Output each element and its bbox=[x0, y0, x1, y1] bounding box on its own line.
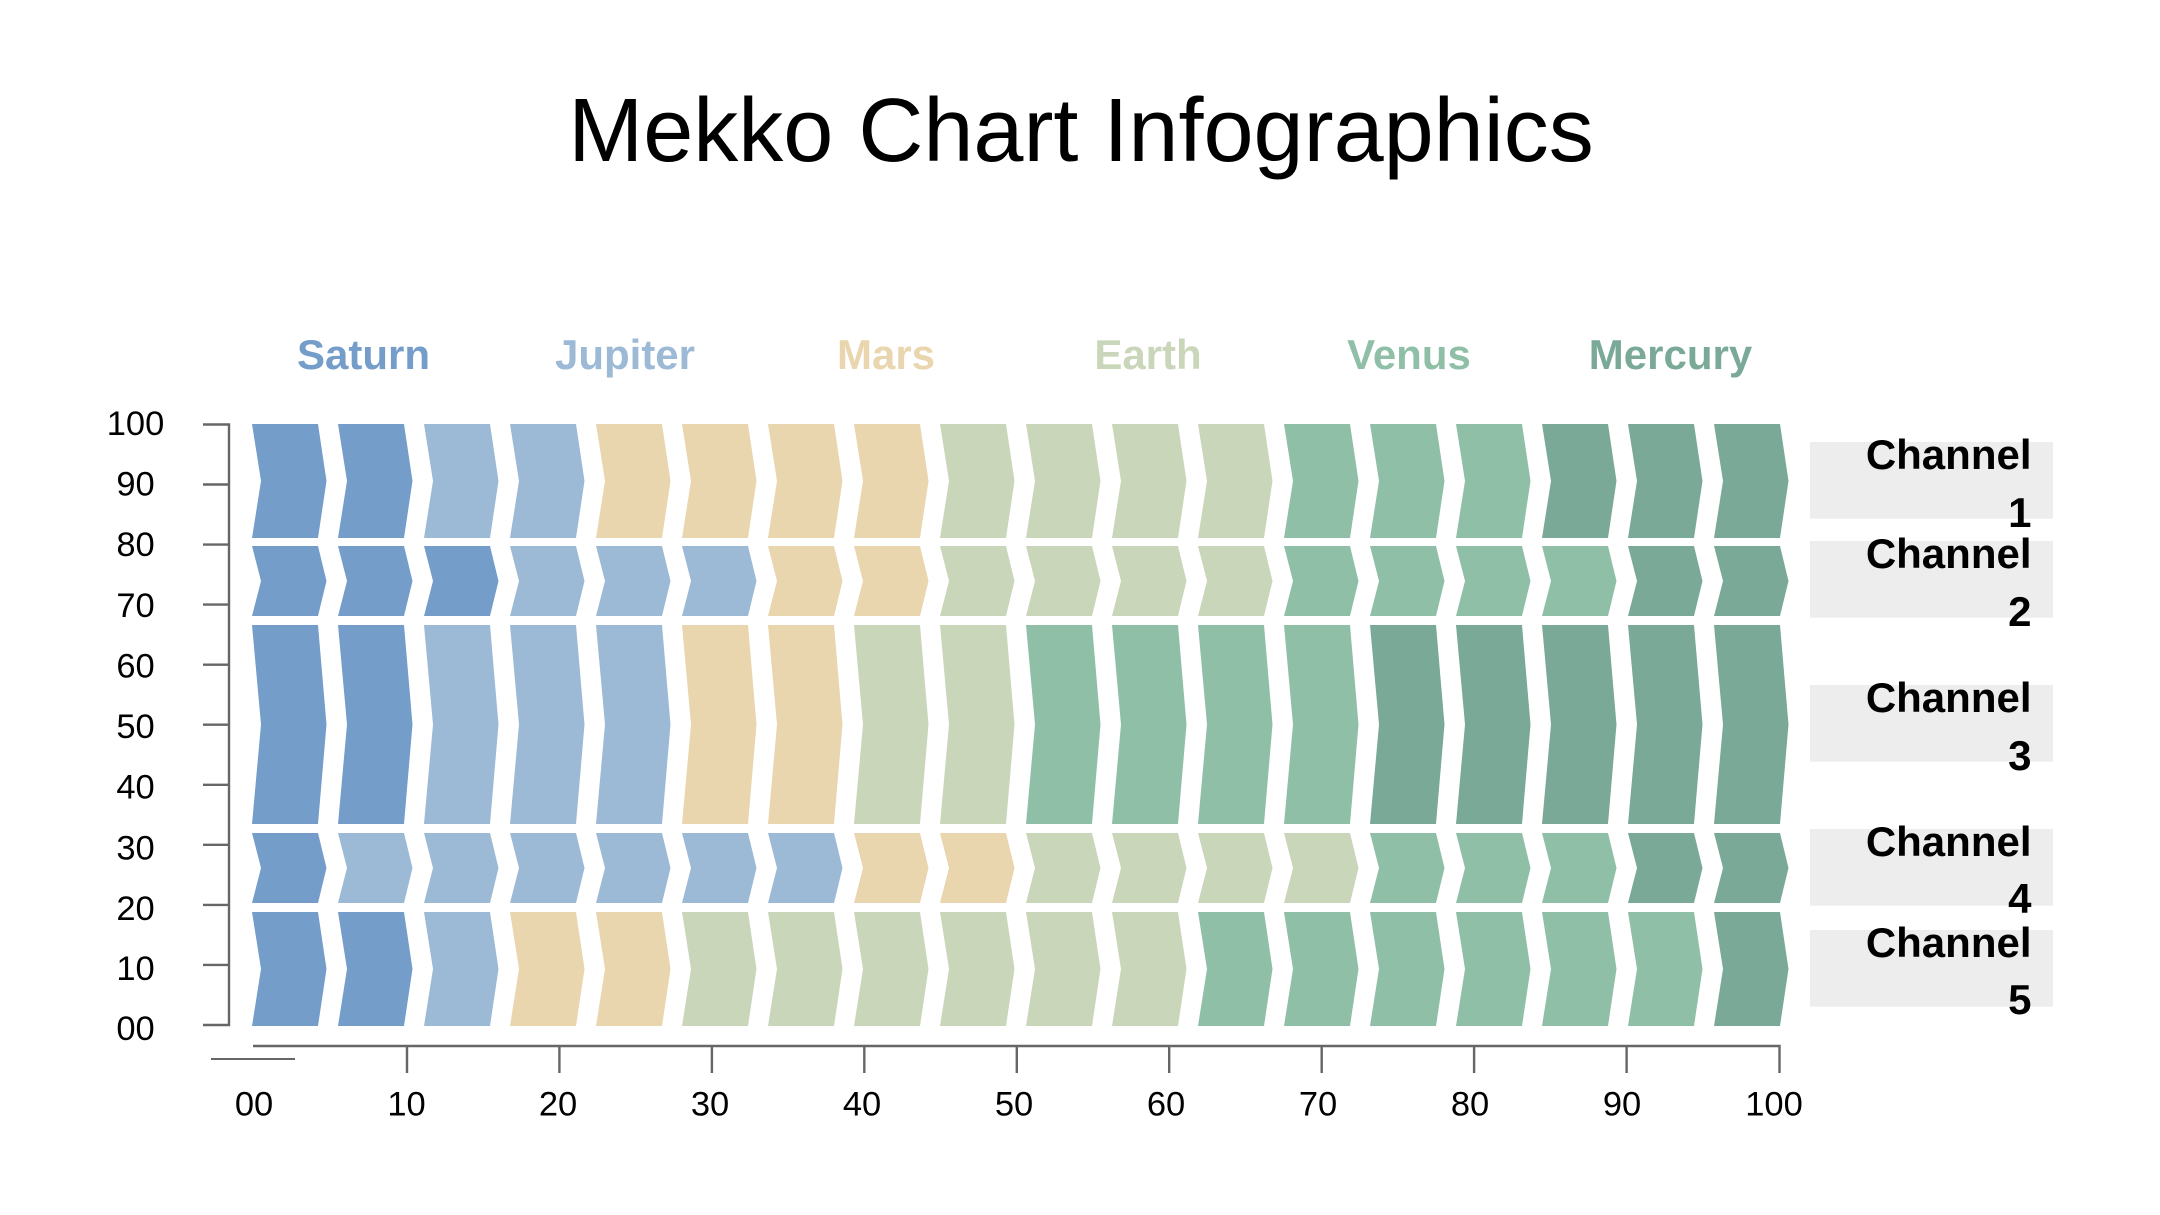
stray axis rule under the origin bbox=[211, 1058, 295, 1060]
channel 1 label: Channel bbox=[1866, 431, 2032, 478]
channel 5 label bbox=[1810, 919, 2053, 1023]
channel 1 label: 1 bbox=[2008, 489, 2032, 536]
channel 1 label bbox=[1810, 431, 2053, 536]
y axis labels: 10 bbox=[116, 950, 155, 988]
channel 3 label: Channel bbox=[1866, 674, 2032, 721]
channel 2 label: 2 bbox=[2008, 588, 2032, 635]
channel 4 label: Channel bbox=[1866, 818, 2032, 865]
x axis labels: 80 bbox=[1451, 1086, 1489, 1124]
y axis labels: 100 bbox=[107, 405, 164, 443]
y axis labels: 50 bbox=[116, 708, 155, 746]
x axis labels: 10 bbox=[387, 1086, 426, 1124]
x axis with ticks bbox=[253, 1046, 1780, 1073]
channel 4 label: 4 bbox=[2008, 875, 2032, 922]
x axis labels: 00 bbox=[235, 1086, 273, 1124]
chart row: channel 1 chevrons bbox=[252, 424, 1788, 538]
x axis labels: 70 bbox=[1299, 1086, 1337, 1124]
channel 3 label: 3 bbox=[2008, 732, 2032, 779]
legend label: Mars: Mars bbox=[837, 331, 935, 378]
legend label: Earth: Earth bbox=[1094, 331, 1202, 378]
y axis labels: 70 bbox=[116, 587, 155, 625]
chart row: channel 4 chevrons bbox=[252, 833, 1788, 903]
chart row: channel 3 chevrons bbox=[252, 625, 1788, 824]
channel 5 label: Channel bbox=[1866, 919, 2032, 966]
chart row: channel 5 chevrons bbox=[252, 912, 1788, 1026]
y axis labels: 90 bbox=[116, 466, 155, 504]
x axis labels: 50 bbox=[995, 1086, 1033, 1124]
chart row: channel 2 chevrons bbox=[252, 546, 1788, 616]
channel 3 label bbox=[1810, 674, 2053, 779]
y axis labels: 80 bbox=[116, 526, 155, 564]
y axis labels: 30 bbox=[116, 830, 155, 868]
channel 2 label bbox=[1810, 530, 2053, 635]
legend label: Venus: Venus bbox=[1347, 331, 1471, 378]
y axis labels bbox=[107, 405, 164, 1048]
y axis with ticks bbox=[203, 424, 229, 1025]
x axis labels: 100 bbox=[1745, 1086, 1803, 1124]
channel 4 label bbox=[1810, 818, 2053, 922]
channel 2 label: Channel bbox=[1866, 530, 2032, 577]
legend label: Mercury: Mercury bbox=[1589, 331, 1753, 378]
x axis labels: 90 bbox=[1603, 1086, 1641, 1124]
legend: planet series labels bbox=[297, 331, 1753, 378]
x axis labels: 40 bbox=[843, 1086, 881, 1124]
legend label: Saturn: Saturn bbox=[297, 331, 430, 378]
channel 5 label: 5 bbox=[2008, 976, 2032, 1023]
x axis labels bbox=[235, 1086, 1803, 1124]
legend label: Jupiter: Jupiter bbox=[555, 331, 695, 378]
y axis labels: 00 bbox=[116, 1010, 155, 1048]
x axis labels: 20 bbox=[539, 1086, 577, 1124]
x axis labels: 60 bbox=[1147, 1086, 1185, 1124]
y axis labels: 40 bbox=[116, 768, 155, 806]
y axis labels: 20 bbox=[116, 890, 155, 928]
title: Mekko Chart Infographics bbox=[568, 81, 1594, 181]
x axis labels: 30 bbox=[691, 1086, 729, 1124]
y axis labels: 60 bbox=[116, 648, 155, 686]
